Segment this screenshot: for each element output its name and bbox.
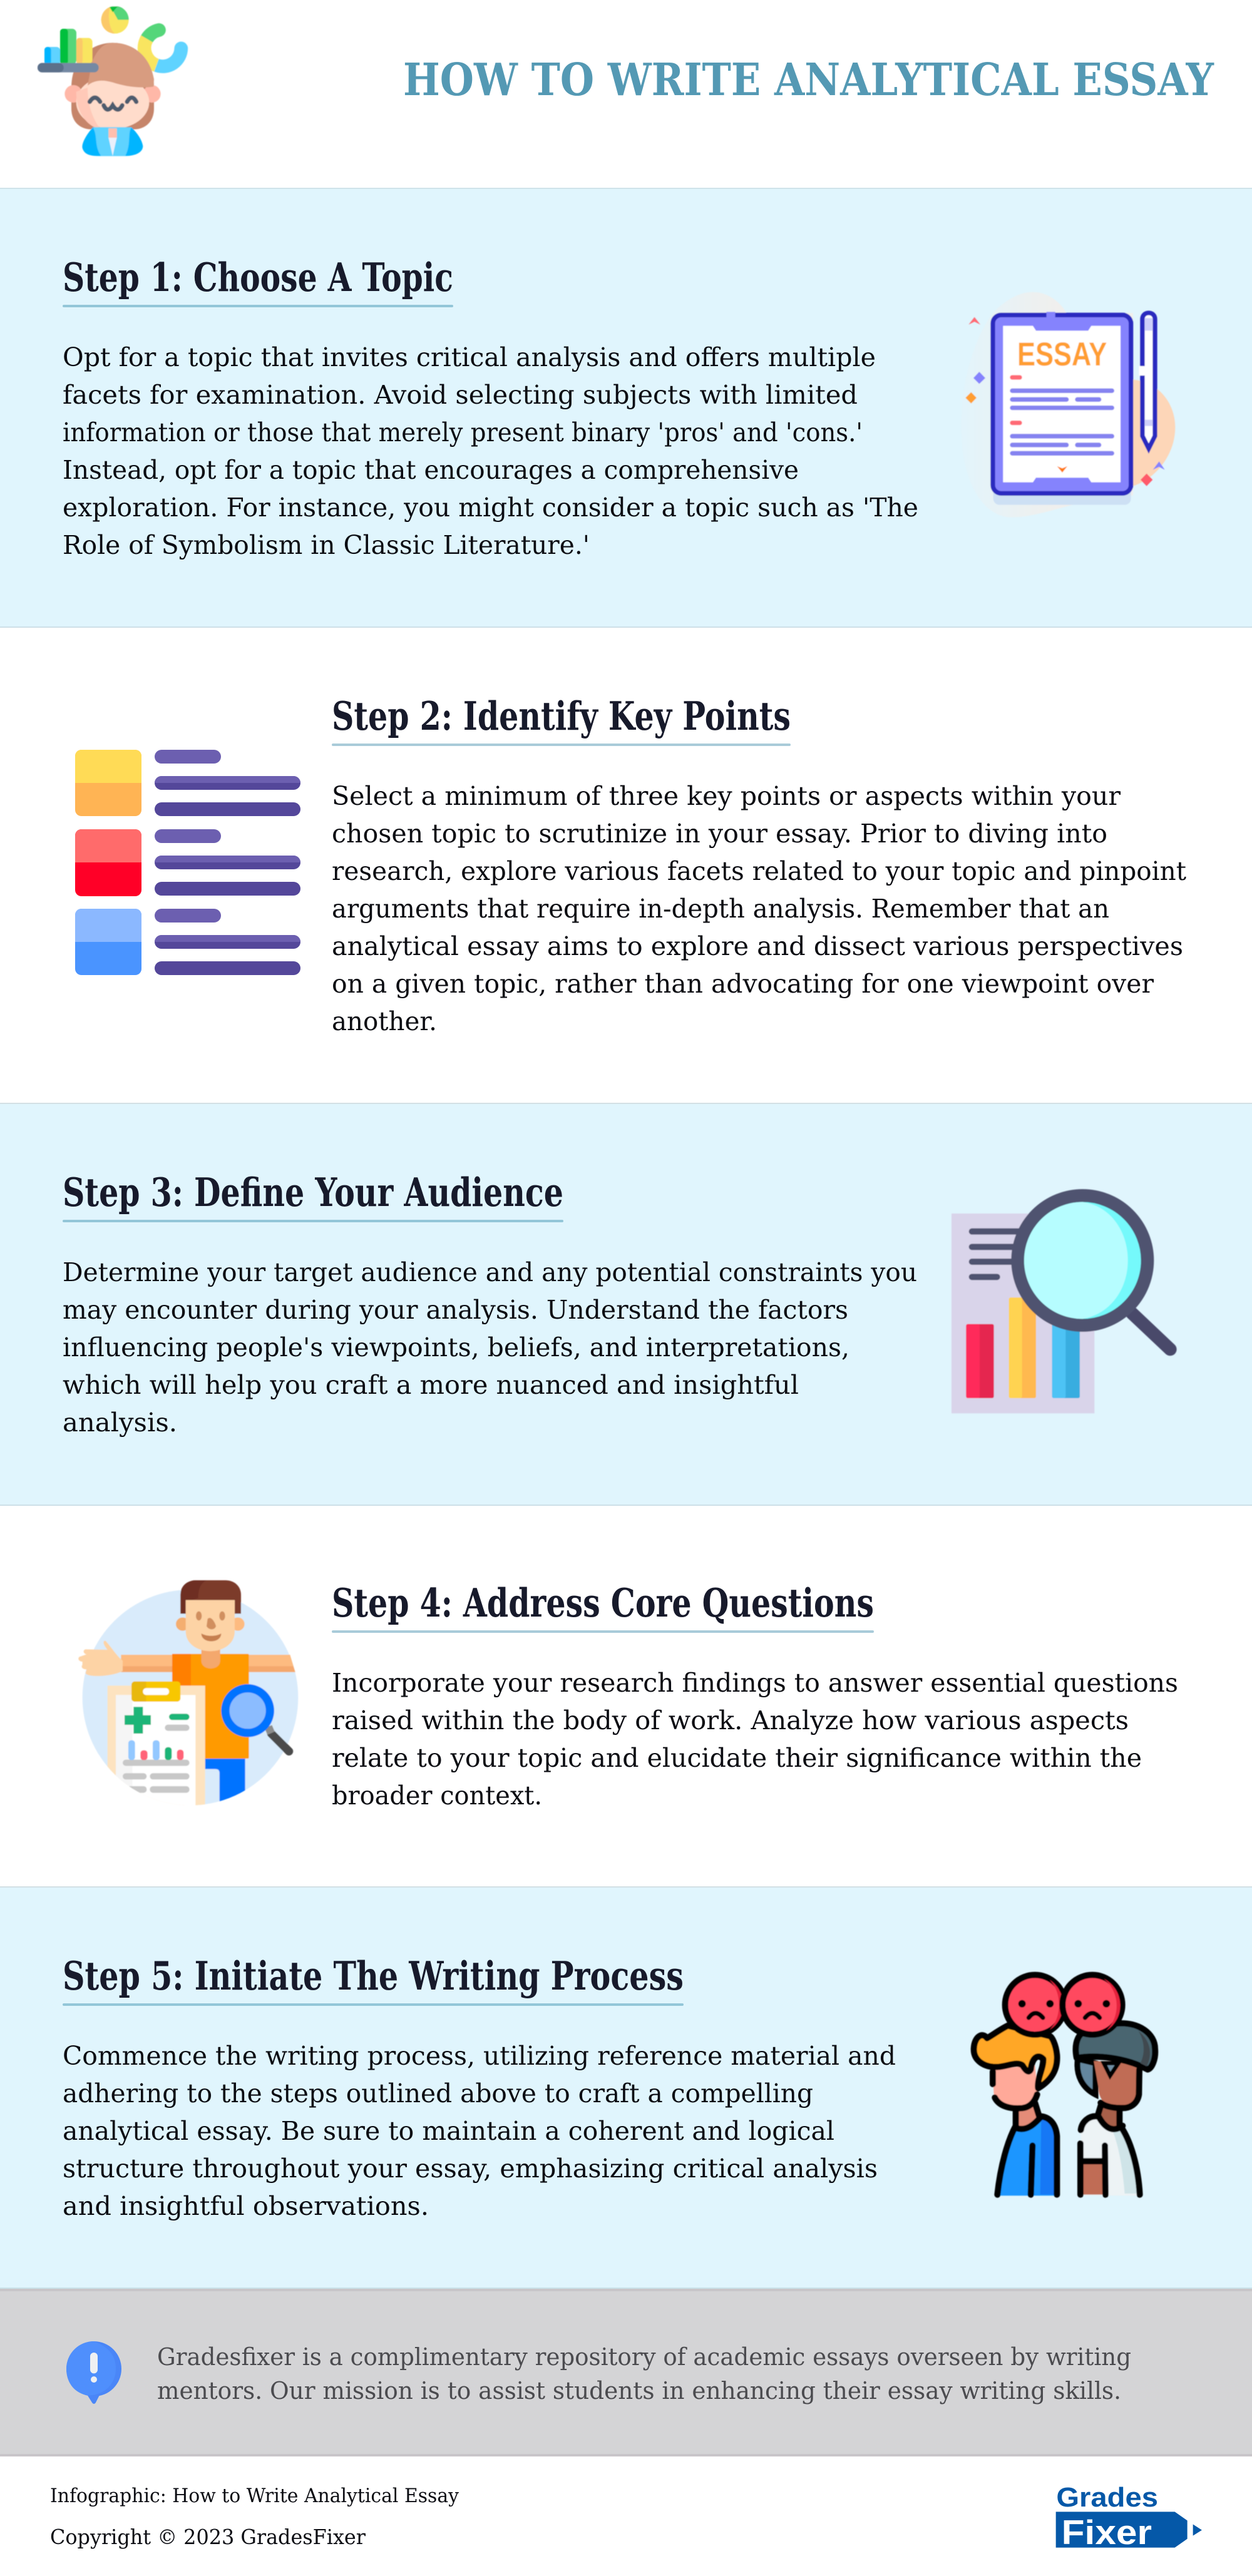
icon: document with chart and magnifier <box>952 1195 1170 1413</box>
heading: step 3: Step 3: Define Your Audience <box>63 1169 563 1215</box>
text block: step 4: broader context. <box>332 1781 542 1811</box>
text block: step 2: research, explore various facets related to your topic and pinpoint <box>332 856 1187 886</box>
panel: step 4 <box>0 1580 1252 1888</box>
icon: essay clipboard and pen <box>961 292 1175 518</box>
heading: step 2: Step 2: Identify Key Points <box>332 693 791 739</box>
text block: step 1: Instead, opt for a topic that encourages a comprehensive <box>63 455 799 485</box>
text block: step 3: analysis. <box>63 1408 177 1438</box>
header <box>0 0 1252 189</box>
icon: info speech bubble <box>66 2341 121 2404</box>
heading: step 4: Step 4: Address Core Questions <box>332 1580 874 1626</box>
sad faces <box>1005 1975 1122 2035</box>
text block: step 1 <box>63 342 918 560</box>
icon: key points list <box>75 750 300 975</box>
heading: step 5: Step 5: Initiate The Writing Process <box>63 1953 684 1999</box>
text block: step 3: Determine your target audience and any potential constraints you <box>63 1257 917 1287</box>
footer <box>0 2456 1252 2576</box>
panel: step 5 <box>0 1888 1252 2289</box>
text block: step 1: Opt for a topic that invites critical analysis and offers multiple <box>63 342 876 372</box>
icon: mascot with charts <box>25 0 192 156</box>
text block: step 2 <box>332 781 1187 1036</box>
text block: step 5: analytical essay. Be sure to maintain a coherent and logical <box>63 2116 834 2146</box>
text block: step 4: raised within the body of work. Analyze how various aspects <box>332 1705 1129 1735</box>
icon: person with clipboard and magnifier <box>78 1580 298 1809</box>
text block: step 5: structure throughout your essay, emphasizing critical analysis <box>63 2154 878 2184</box>
text block: step 3: influencing people's viewpoints, beliefs, and interpretations, <box>63 1332 849 1362</box>
text block: step 2: Select a minimum of three key points or aspects within your <box>332 781 1121 811</box>
text block: step 5: adhering to the steps outlined above to craft a compelling <box>63 2078 813 2108</box>
panel: step 2 <box>0 628 1252 1104</box>
text block: step 3: may encounter during your analysis. Understand the factors <box>63 1295 848 1325</box>
text block: step 4: Incorporate your research findings to answer essential questions <box>332 1668 1178 1698</box>
right person <box>1076 2023 1155 2195</box>
text block: step 4: relate to your topic and elucidate their significance within the <box>332 1743 1142 1773</box>
text block: step 1: facets for examination. Avoid selecting subjects with limited <box>63 380 858 410</box>
text block: step 5: Commence the writing process, utilizing reference material and <box>63 2041 896 2071</box>
callout text: Gradesfixer is a complimentary repository of academic essays overseen by writing <box>157 2343 1131 2371</box>
footer caption: Infographic: How to Write Analytical Essay <box>50 2485 459 2507</box>
icon: essay clipboard and pen: ESSAY <box>1017 336 1107 373</box>
text block: step 1: exploration. For instance, you might consider a topic such as 'The <box>63 493 918 523</box>
heading: step 1: Step 1: Choose A Topic <box>63 254 453 300</box>
text block: step 3: which will help you craft a more nuanced and insightful <box>63 1370 799 1400</box>
copyright: Copyright © 2023 GradesFixer <box>50 2525 366 2549</box>
panel: step 3 <box>0 1104 1252 1506</box>
text block: step 5 <box>63 2041 896 2221</box>
text block: step 2: analytical essay aims to explore and dissect various perspectives <box>332 931 1183 961</box>
callout text: mentors. Our mission is to assist students in enhancing their essay writing skills. <box>157 2377 1121 2405</box>
icon: two people with sad faces <box>974 1975 1155 2195</box>
panel: step 1 <box>0 189 1252 628</box>
logo: GradesFixer <box>1056 2483 1202 2552</box>
left person <box>974 2026 1057 2195</box>
callout text <box>157 2343 1131 2405</box>
text block: step 1: Role of Symbolism in Classic Literature.' <box>63 530 590 560</box>
text block: step 5: and insightful observations. <box>63 2191 429 2221</box>
logo: GradesFixer: Grades <box>1056 2483 1158 2513</box>
text block: step 1: information or those that merely present binary 'pros' and 'cons.' <box>63 417 863 447</box>
text block: step 2: arguments that require in-depth analysis. Remember that an <box>332 894 1109 924</box>
text block: step 2: on a given topic, rather than advocating for one viewpoint over <box>332 969 1154 999</box>
callout panel <box>0 2289 1252 2456</box>
logo: GradesFixer: Fixer <box>1062 2513 1152 2552</box>
text block: step 2: chosen topic to scrutinize in your essay. Prior to diving into <box>332 819 1107 849</box>
text block: step 2: another. <box>332 1006 437 1036</box>
text block: step 3 <box>63 1257 917 1438</box>
text block: step 4 <box>332 1668 1178 1811</box>
